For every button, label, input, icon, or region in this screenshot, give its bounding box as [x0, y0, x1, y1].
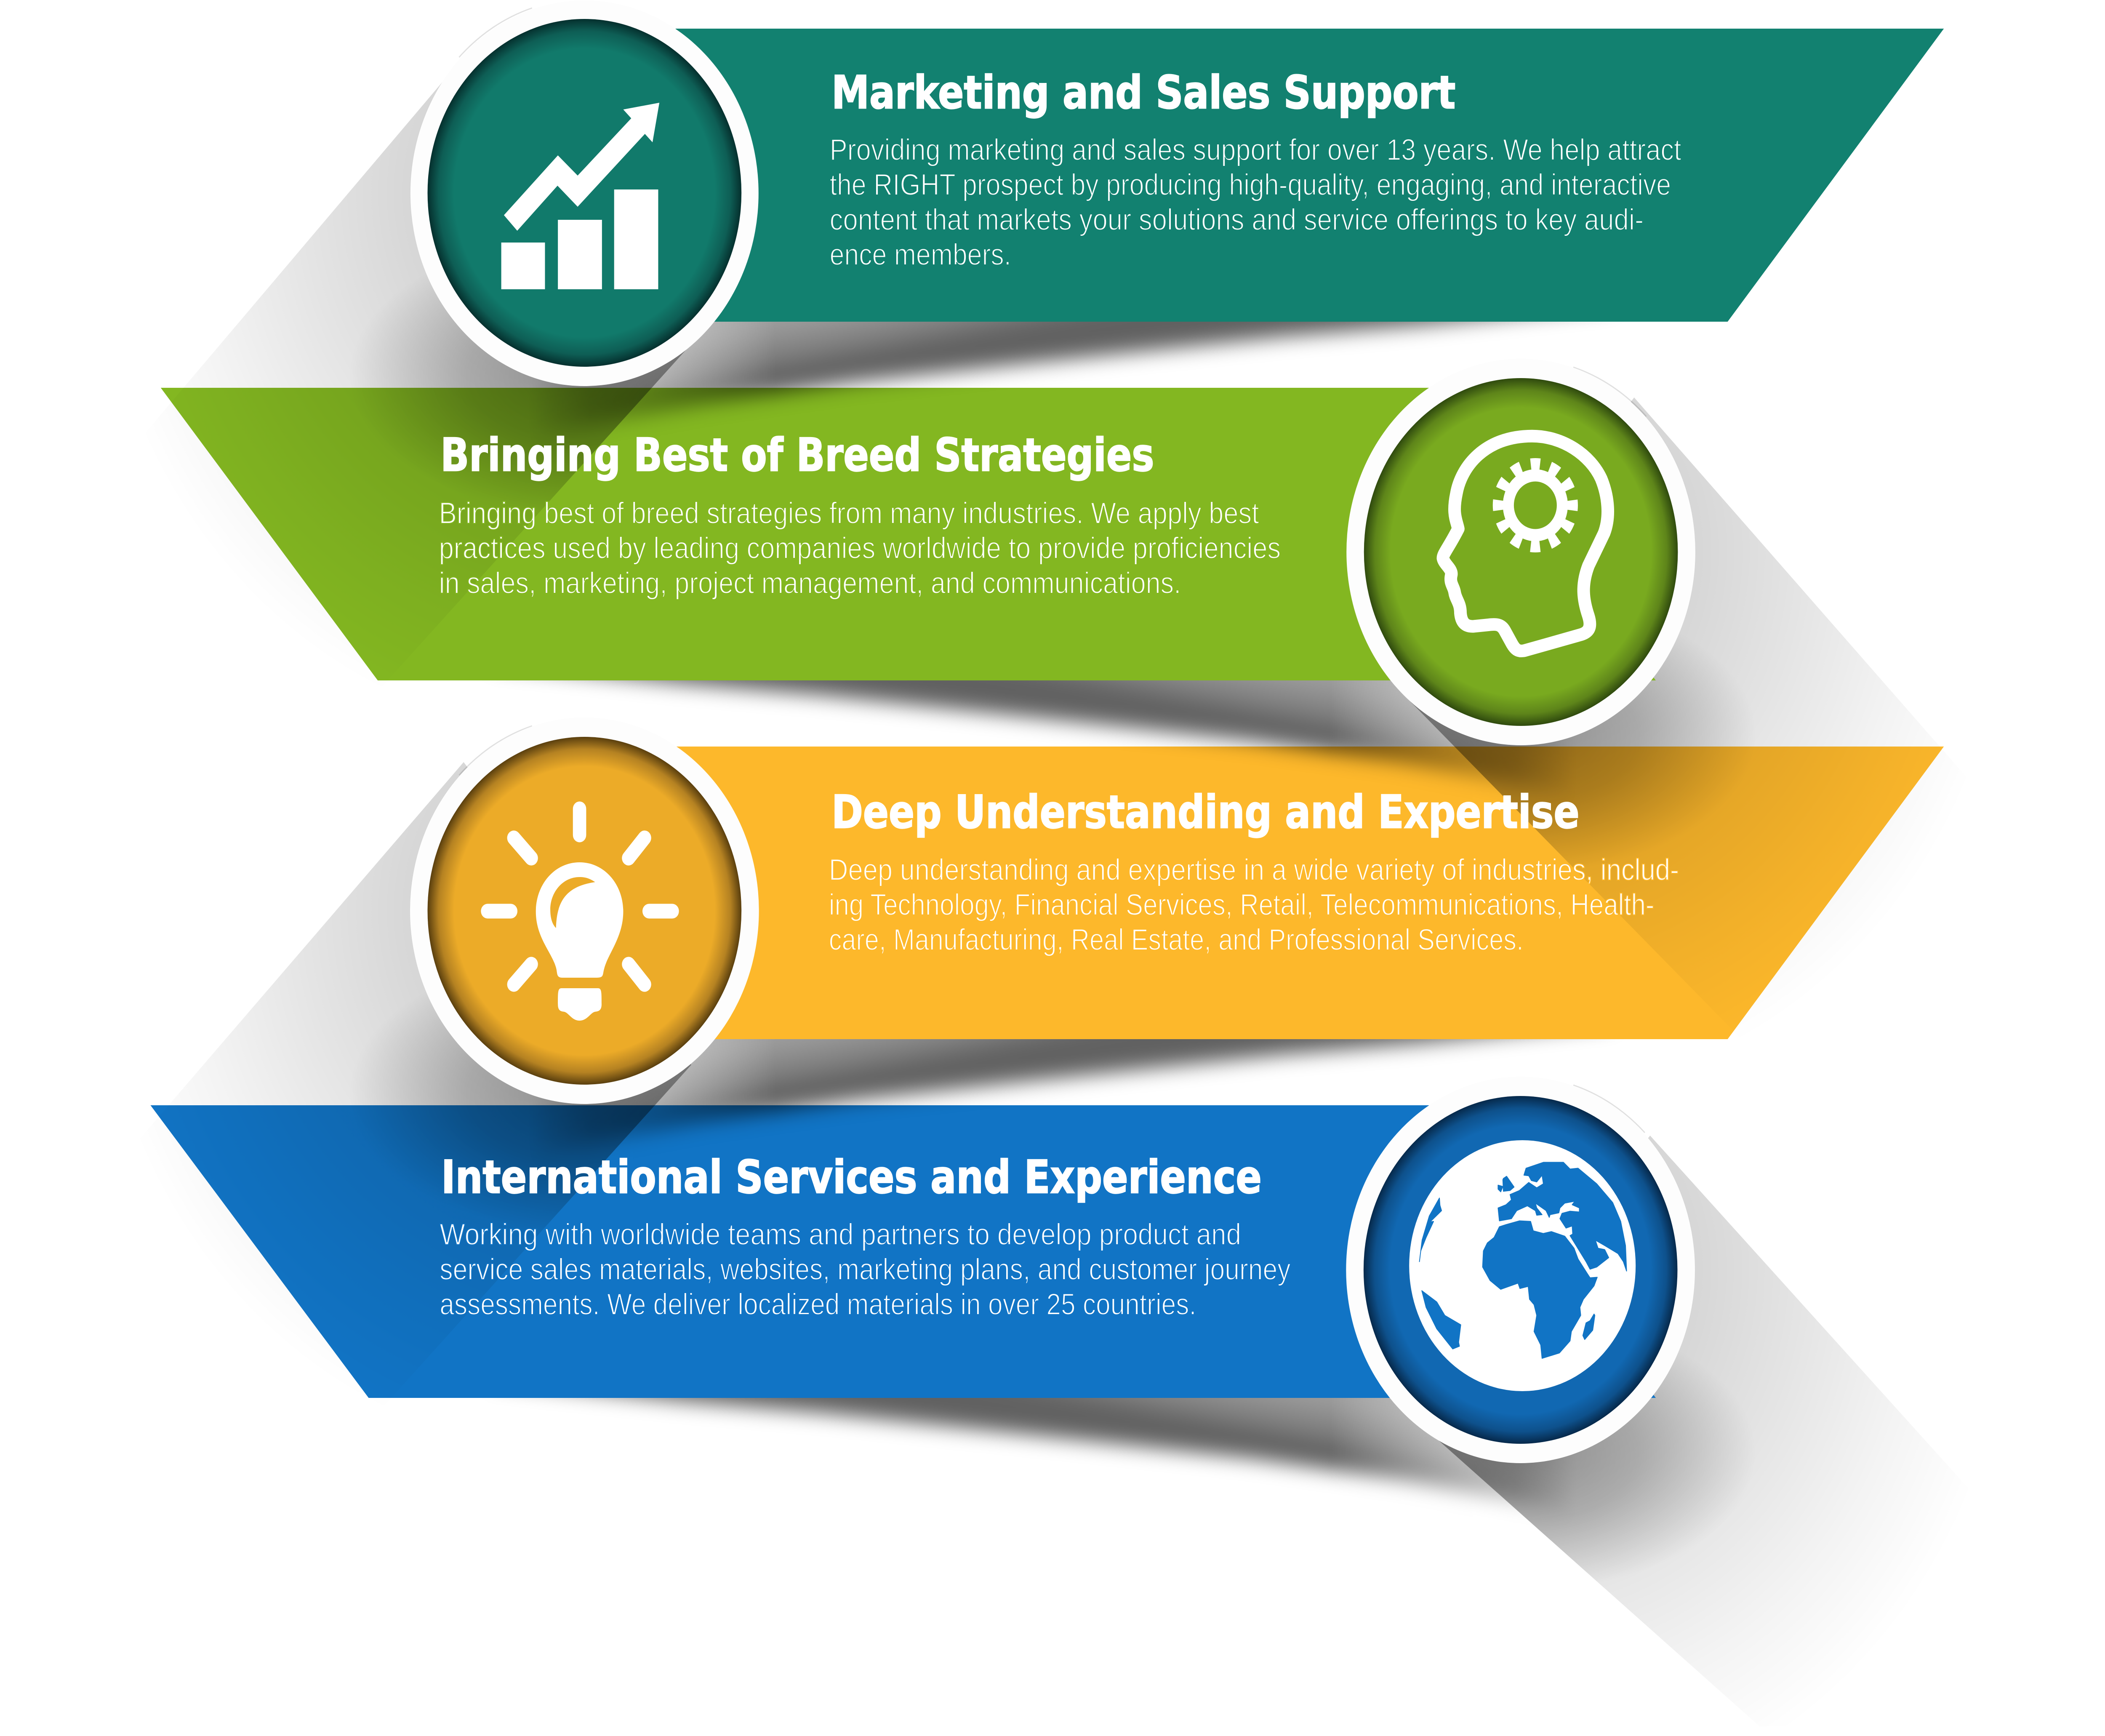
- body text: assessments. We deliver localized materials in over 25 countries.: [440, 1288, 1196, 1321]
- body text: care, Manufacturing, Real Estate, and Professional Services.: [829, 923, 1524, 957]
- band: Bringing Best of Breed: [161, 388, 1656, 680]
- body text: content that markets your solutions and service offerings to key audi-: [830, 203, 1644, 237]
- body text: Deep understanding and expertise in a wide variety of industries, includ-: [829, 853, 1679, 887]
- heading: Bringing Best of Breed Strategies: [440, 429, 1154, 482]
- panel: Marketing and Sales Support: [410, 0, 1681, 386]
- body text: the RIGHT prospect by producing high-quality, engaging, and interactive: [830, 168, 1671, 202]
- body text: ence members.: [830, 238, 1011, 272]
- icon circle: globe: [1346, 1077, 1695, 1463]
- icon: gear: [1499, 465, 1572, 546]
- icon circle: growth chart: [410, 0, 759, 386]
- body text: in sales, marketing, project management, and communications.: [439, 567, 1181, 600]
- band: Marketing and Sales: [584, 29, 1944, 322]
- icon: head outline: [1443, 436, 1608, 651]
- body text: [829, 853, 1679, 957]
- shadow cast by band 3 and circle 3: [91, 726, 1611, 1458]
- icon: bulb rays: [488, 809, 672, 984]
- panel: Bringing Best of Breed Strategies: [439, 359, 1695, 745]
- body text: Providing marketing and sales support for over 13 years. We help attract: [830, 133, 1681, 167]
- shadow cast by band 4 and circle 4: [494, 1085, 2014, 1726]
- body text: ing Technology, Financial Services, Retail, Telecommunications, Health-: [829, 888, 1654, 922]
- body text: [439, 497, 1281, 600]
- body text: service sales materials, websites, marketing plans, and customer journey: [440, 1253, 1291, 1286]
- shadow cast by band 2 and circle 2: [494, 367, 2015, 1099]
- shadow cast by band 1 and circle 1: [91, 8, 1611, 740]
- icon circle: light bulb: [410, 717, 759, 1104]
- body text: [830, 133, 1681, 272]
- body text: Bringing best of breed strategies from many industries. We apply best: [439, 497, 1259, 530]
- heading: Deep Understanding and Expertise: [831, 786, 1580, 839]
- icon: globe: [1409, 1140, 1636, 1391]
- heading: International Services and Experience: [441, 1151, 1262, 1204]
- icon circle: head with gear: [1346, 359, 1695, 745]
- icon: bars and rising arrow: [501, 103, 659, 289]
- heading: Marketing and Sales Support: [831, 67, 1455, 119]
- body text: Working with worldwide teams and partners to develop product and: [440, 1218, 1241, 1251]
- icon: bulb: [536, 862, 623, 1021]
- band: Deep Understanding: [584, 747, 1944, 1039]
- body text: [440, 1218, 1291, 1321]
- panel: International Services and Experience: [440, 1077, 1695, 1463]
- band: International Services: [150, 1105, 1656, 1398]
- panel: Deep Understanding and Expertise: [410, 717, 1679, 1104]
- body text: practices used by leading companies worldwide to provide proficiencies: [439, 532, 1281, 565]
